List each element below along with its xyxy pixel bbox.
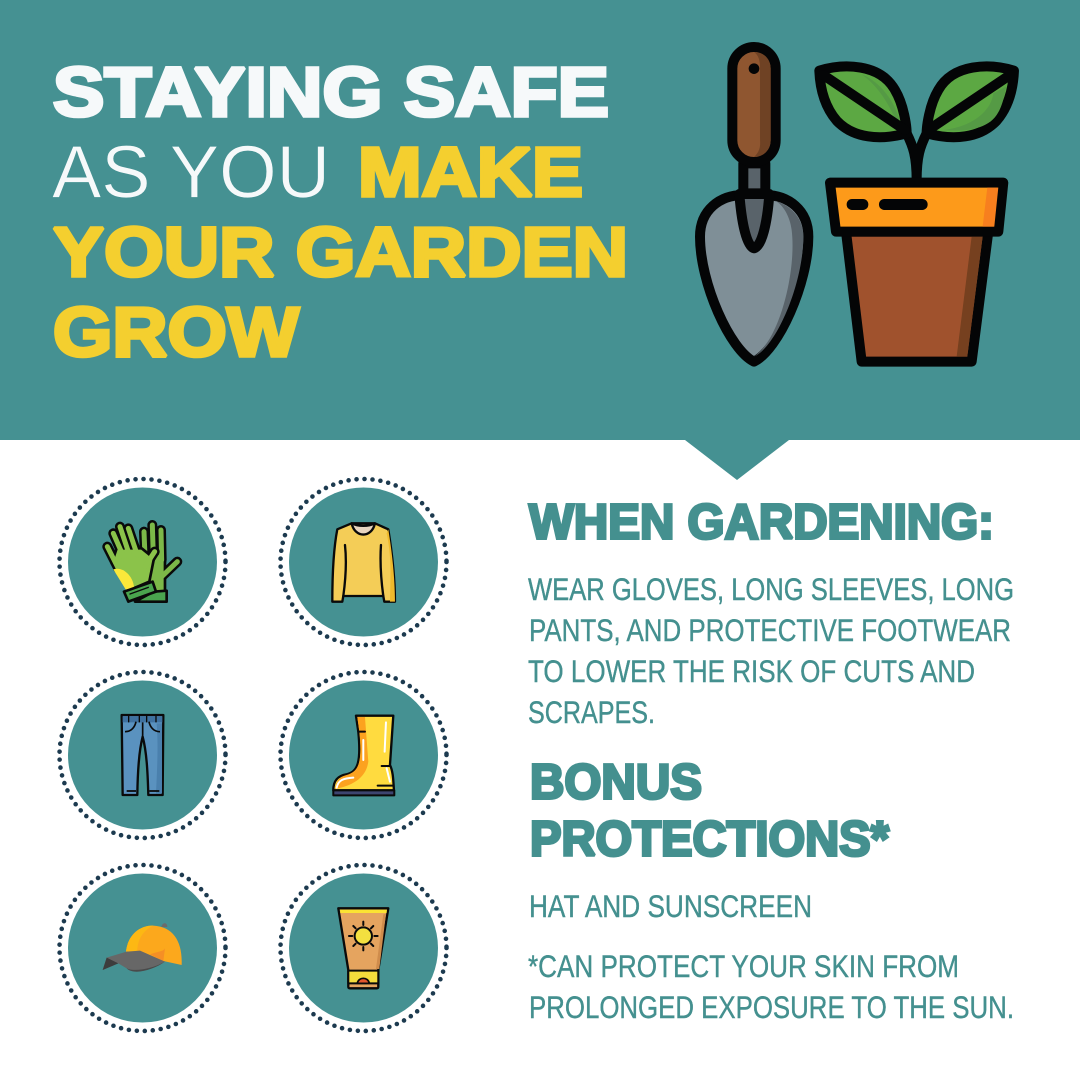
heading: bonus protections [530,756,890,866]
panel: gloves [60,479,226,645]
left leaf [819,66,907,137]
icon: potted seedling [819,66,1014,362]
icon: garden trowel [700,47,808,362]
seedling stem [907,133,927,180]
panel: rubber boot [280,672,446,838]
panel: sweater [280,479,446,645]
text block: hat and sunscreen: HAT AND SUNSCREEN [529,888,812,924]
title: MAKE [358,133,583,211]
panel: sunscreen [280,865,446,1031]
text block: footnote: *CAN PROTECT YOUR SKIN FROM [528,948,959,984]
title [52,53,628,371]
title: STAYING SAFE [53,53,609,131]
pot body [846,232,988,362]
title: AS YOU [52,130,330,214]
title: YOUR GARDEN [53,213,628,291]
text block: gardening advice: SCRAPES. [528,694,655,730]
header band with pointer [0,0,1080,480]
heading: bonus protections: BONUS [530,756,702,810]
icon: gloves [107,525,177,602]
text block: gardening advice: TO LOWER THE RISK OF CUTS AND [528,653,975,689]
icon: sunscreen tube [338,908,388,988]
text block: gardening advice [528,571,1014,730]
pot rim [830,183,1003,232]
icon: baseball cap [103,923,182,972]
title: GROW [53,293,299,371]
icon: jeans [122,715,163,795]
icon: rubber boot [333,716,394,795]
icon: long sleeve top [332,523,395,602]
text block: footnote [528,948,1014,1025]
heading: when gardening: WHEN GARDENING: [529,496,994,550]
panel: jeans [60,672,226,838]
panel: cap [60,865,226,1031]
heading: bonus protections: PROTECTIONS* [530,812,890,866]
right leaf [927,66,1014,137]
